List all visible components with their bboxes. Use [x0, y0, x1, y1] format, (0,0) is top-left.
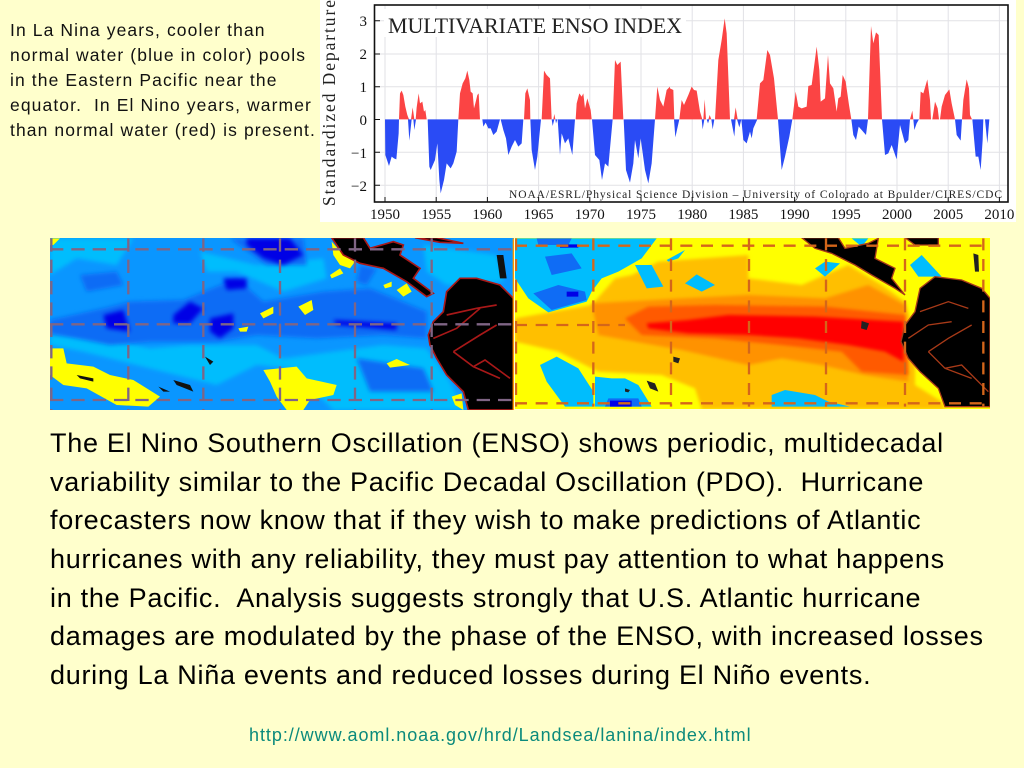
- caption: La Nina and El Nino explanation: than normal water (red) is present.: [10, 120, 316, 140]
- map: El Nino sea surface temperatures: [515, 238, 990, 409]
- body text: ENSO and hurricane damages: The El Nino Southern Oscillation (ENSO) shows periodic, multidecadal: [50, 428, 944, 458]
- body text: ENSO and hurricane damages: hurricanes with any reliability, they must pay attention to what happens: [50, 544, 945, 574]
- y-axis labels: 3: [360, 14, 367, 30]
- y-axis labels: 2: [360, 47, 367, 63]
- body text: ENSO and hurricane damages: damages are modulated by the phase of the ENSO, with increased losses: [50, 621, 984, 651]
- caption: La Nina and El Nino explanation: in the Eastern Pacific near the: [10, 70, 278, 90]
- caption: La Nina and El Nino explanation: equator. In El Nino years, warmer: [10, 95, 312, 115]
- body text: ENSO and hurricane damages: during La Niña events and reduced losses during El Niño events.: [50, 660, 871, 690]
- chart: Multivariate ENSO Index: [320, 0, 1016, 222]
- y-axis labels: 1: [360, 80, 367, 96]
- caption: La Nina and El Nino explanation: [10, 20, 316, 140]
- source link: http://www.aoml.noaa.gov/hrd/Landsea/lanina/index.html: [249, 725, 752, 745]
- body text: ENSO and hurricane damages: forecasters now know that if they wish to make predictions of Atlantic: [50, 505, 921, 535]
- land: Central and South America: [802, 238, 990, 407]
- chart source credit: NOAA/ESRL/Physical Science Division – University of Colorado at Boulder/CIRES/CDC: [509, 189, 1002, 201]
- white backing behind chart title: [384, 9, 686, 37]
- caption: La Nina and El Nino explanation: normal water (blue in color) pools: [10, 45, 306, 65]
- y-axis labels: [351, 14, 367, 195]
- body text: ENSO and hurricane damages: in the Pacific. Analysis suggests strongly that U.S. Atlantic hurricane: [50, 583, 921, 613]
- chart title: MULTIVARIATE ENSO INDEX: [388, 13, 682, 38]
- x-axis labels: [370, 207, 1014, 223]
- caption: La Nina and El Nino explanation: In La Nina years, cooler than: [10, 20, 266, 40]
- y-axis labels: 0: [360, 113, 367, 129]
- plot frame and tick marks: [374, 5, 1008, 202]
- y-axis labels: −2: [351, 179, 367, 195]
- body text: ENSO and hurricane damages: variability similar to the Pacific Decadal Oscillation (PDO). Hurricane: [50, 467, 924, 497]
- body text: ENSO and hurricane damages: [50, 428, 984, 690]
- series: positive departures in red: [399, 18, 972, 119]
- series: negative departures in blue: [385, 119, 989, 193]
- y-axis labels: −1: [351, 146, 367, 162]
- land: Central and South America: [332, 238, 513, 410]
- map: La Nina sea surface temperatures: [50, 238, 514, 410]
